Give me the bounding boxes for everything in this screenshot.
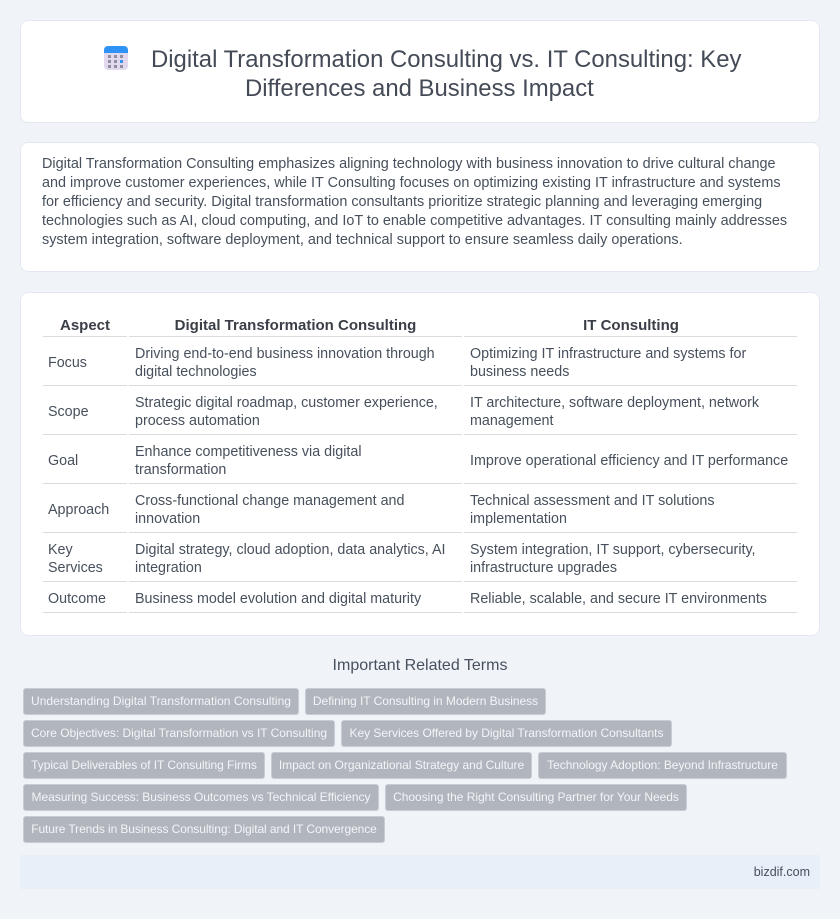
row: Outcome: Outcome bbox=[48, 591, 106, 607]
row: Focus bbox=[48, 346, 746, 380]
row: Scope: Scope bbox=[48, 404, 89, 420]
row: Focus: Driving end-to-end business innovation through bbox=[135, 346, 435, 362]
table header bbox=[60, 317, 679, 334]
related terms tags: Impact on Organizational Strategy and Culture bbox=[279, 758, 524, 772]
intro paragraph: and improve customer experiences, while IT Consulting focuses on optimizing existing IT infrastructure and systems bbox=[42, 175, 781, 191]
related terms tags: Core Objectives: Digital Transformation vs IT Consulting bbox=[31, 726, 327, 740]
intro paragraph bbox=[42, 156, 787, 248]
row: Focus: Optimizing IT infrastructure and systems for bbox=[470, 346, 746, 362]
related terms tags: Future Trends in Business Consulting: Digital and IT Convergence bbox=[31, 822, 377, 836]
footer bar bbox=[20, 855, 820, 889]
row: Goal: Improve operational efficiency and IT performance bbox=[470, 453, 788, 469]
row: Outcome: Reliable, scalable, and secure IT environments bbox=[470, 591, 767, 607]
comparison table card bbox=[20, 292, 820, 636]
row: Key Services: infrastructure upgrades bbox=[470, 560, 617, 576]
row: Scope bbox=[48, 395, 759, 429]
row: Key Services: integration bbox=[135, 560, 202, 576]
footer brand: bizdif.com bbox=[754, 865, 810, 879]
row: Approach: innovation bbox=[135, 511, 200, 527]
row: Key Services: Services bbox=[48, 560, 103, 576]
related terms tags: Choosing the Right Consulting Partner for Your Needs bbox=[393, 790, 679, 804]
intro paragraph: Digital Transformation Consulting emphasizes aligning technology with business innovation to drive cultural change bbox=[42, 156, 776, 172]
row: Goal: transformation bbox=[135, 462, 226, 478]
title bbox=[151, 46, 742, 102]
row: Scope: IT architecture, software deployment, network bbox=[470, 395, 759, 411]
row: Focus: digital technologies bbox=[135, 364, 257, 380]
intro paragraph: system integration, software deployment, and technical support to ensure seamless daily operations. bbox=[42, 232, 683, 248]
row: Key Services: Key bbox=[48, 542, 73, 558]
related terms tags: Typical Deliverables of IT Consulting Firms bbox=[31, 758, 257, 772]
related terms tags: Key Services Offered by Digital Transformation Consultants bbox=[350, 726, 663, 740]
row: Key Services: Digital strategy, cloud adoption, data analytics, AI bbox=[135, 542, 445, 558]
related terms tags: Measuring Success: Business Outcomes vs Technical Efficiency bbox=[32, 790, 370, 804]
title: Digital Transformation Consulting vs. IT Consulting: Key bbox=[151, 46, 741, 73]
table header: Digital Transformation Consulting bbox=[175, 317, 416, 334]
intro text card bbox=[20, 142, 820, 272]
related terms tags: Understanding Digital Transformation Consulting bbox=[31, 694, 291, 708]
intro paragraph: technologies such as AI, cloud computing, and IoT to enable competitive advantages. IT consulting mainly addresses bbox=[42, 213, 787, 229]
row: Scope: process automation bbox=[135, 413, 260, 429]
table header: IT Consulting bbox=[583, 317, 679, 334]
table header: Aspect bbox=[60, 317, 110, 334]
row: Outcome bbox=[48, 591, 767, 607]
row: Focus: business needs bbox=[470, 364, 569, 380]
row: Approach: Technical assessment and IT solutions bbox=[470, 493, 714, 509]
related terms heading: Important Related Terms bbox=[333, 657, 507, 674]
title: Differences and Business Impact bbox=[245, 75, 594, 102]
intro paragraph: for efficiency and security. Digital transformation consultants prioritize strategic planning and leveraging emerging bbox=[42, 194, 762, 210]
row: Scope: Strategic digital roadmap, customer experience, bbox=[135, 395, 438, 411]
row: Goal: Enhance competitiveness via digital bbox=[135, 444, 362, 460]
row: Key Services: System integration, IT support, cybersecurity, bbox=[470, 542, 756, 558]
row: Outcome: Business model evolution and digital maturity bbox=[135, 591, 421, 607]
icon: calendar bbox=[104, 46, 128, 70]
row: Goal: Goal bbox=[48, 453, 78, 469]
row: Approach: Cross-functional change management and bbox=[135, 493, 404, 509]
row: Approach bbox=[48, 493, 714, 527]
related terms tags: Technology Adoption: Beyond Infrastructure bbox=[547, 758, 778, 772]
row: Approach: implementation bbox=[470, 511, 567, 527]
row: Focus: Focus bbox=[48, 355, 87, 371]
related terms tags bbox=[23, 688, 787, 843]
row: Key Services bbox=[48, 542, 756, 576]
row: Scope: management bbox=[470, 413, 553, 429]
row: Goal bbox=[48, 444, 788, 478]
row: Approach: Approach bbox=[48, 502, 109, 518]
title card bbox=[20, 20, 820, 123]
related terms tags: Defining IT Consulting in Modern Business bbox=[313, 694, 538, 708]
